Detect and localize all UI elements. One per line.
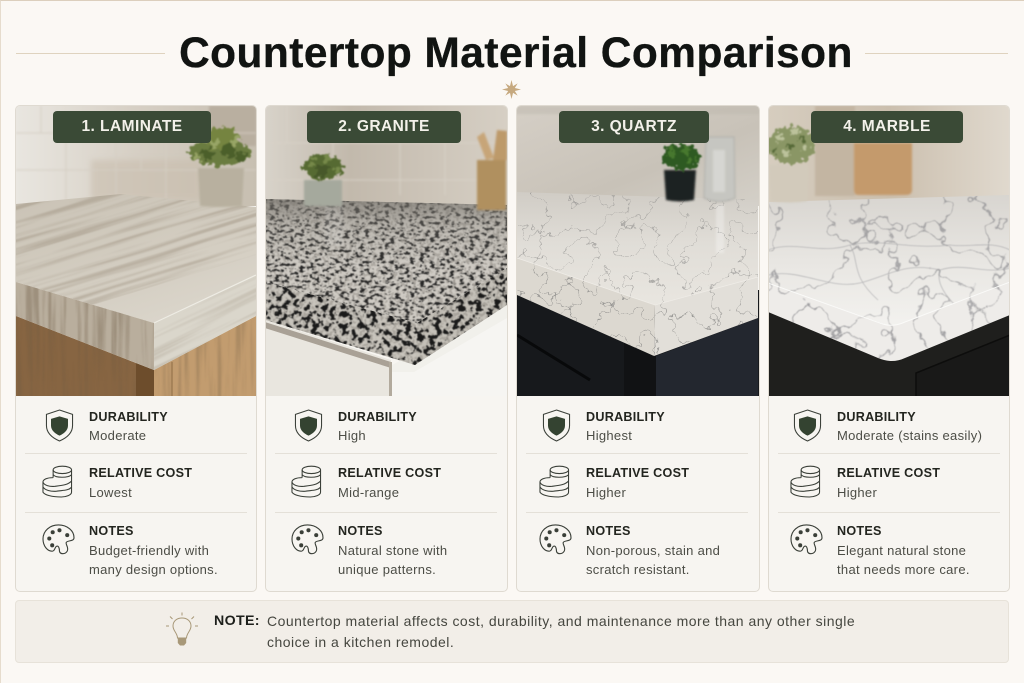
cost label: RELATIVE COST: [89, 466, 192, 480]
plant and pot: [189, 127, 251, 207]
cabinet: [768, 300, 1010, 396]
cost value: Higher: [837, 485, 877, 500]
icon: shield: [542, 410, 570, 442]
notes label: NOTES: [586, 524, 631, 538]
notes label: NOTES: [837, 524, 882, 538]
notes text: [837, 543, 970, 577]
icon: light bulb: [166, 612, 198, 646]
durability value: Highest: [586, 428, 632, 443]
row: notes: [790, 524, 970, 577]
callout: note bar: [15, 600, 1009, 663]
row: cost: [291, 466, 441, 500]
badge: quartz: 3. QUARTZ: [591, 118, 677, 135]
panel: granite: [265, 105, 508, 592]
utensil crock: [477, 130, 507, 210]
row: notes: [42, 524, 218, 577]
plant and pot: [662, 144, 700, 202]
notes text: scratch resistant.: [586, 562, 690, 577]
icon: shield: [294, 410, 322, 442]
note label: NOTE:: [214, 613, 260, 629]
row: cost: [42, 466, 192, 500]
icon: palette: [291, 524, 324, 554]
icon: coins: [291, 466, 322, 498]
cost label: RELATIVE COST: [338, 466, 441, 480]
icon: coins: [42, 466, 72, 498]
marble edges: [769, 282, 1009, 361]
row: notes: [539, 524, 720, 577]
notes text: Non-porous, stain and: [586, 543, 720, 558]
row: durability: [794, 410, 982, 443]
photo: granite countertop: [266, 106, 507, 396]
durability value: Moderate: [89, 428, 146, 443]
cutting board: [854, 143, 912, 195]
badge: marble: [811, 111, 963, 142]
notes text: that needs more care.: [837, 562, 970, 577]
cost label: RELATIVE COST: [837, 466, 940, 480]
icon: coins: [790, 466, 820, 498]
note text: choice in a kitchen remodel.: [267, 634, 454, 650]
quartz top: [517, 190, 759, 310]
durability label: DURABILITY: [837, 410, 916, 424]
title: Countertop Material Comparison: [179, 29, 853, 76]
plant and pot: [303, 154, 343, 206]
notes label: NOTES: [89, 524, 134, 538]
plant and pot: [767, 126, 815, 202]
note text: Countertop material affects cost, durability, and maintenance more than any other single: [267, 613, 855, 629]
cabinets: [265, 305, 507, 396]
cost label: RELATIVE COST: [586, 466, 689, 480]
panel: laminate: [15, 105, 256, 592]
marble top: [768, 195, 1011, 330]
panel: quartz: [516, 105, 760, 592]
durability label: DURABILITY: [338, 410, 417, 424]
notes text: [338, 543, 447, 577]
quartz edges: [517, 255, 759, 360]
durability value: Moderate (stains easily): [837, 428, 982, 443]
cabinet: [16, 316, 256, 396]
badge: laminate: 1. LAMINATE: [81, 118, 183, 135]
cost value: Higher: [586, 485, 626, 500]
icon: palette: [790, 524, 823, 554]
badge: marble: 4. MARBLE: [843, 118, 931, 135]
durability value: High: [338, 428, 366, 443]
icon: coins: [539, 466, 570, 498]
row: durability: [542, 410, 665, 443]
icon: palette: [539, 524, 572, 554]
row: cost: [790, 466, 940, 500]
badge: laminate: [53, 111, 211, 142]
notes label: NOTES: [338, 524, 383, 538]
notes text: Natural stone with: [338, 543, 447, 558]
notes text: Elegant natural stone: [837, 543, 966, 558]
row: durability: [294, 410, 417, 443]
icon: shield: [46, 410, 74, 442]
granite top: [265, 195, 508, 325]
cabinet: [516, 290, 759, 396]
notes text: [586, 543, 720, 577]
cost value: Lowest: [89, 485, 132, 500]
icon: shield: [794, 410, 822, 442]
notes text: unique patterns.: [338, 562, 436, 577]
countertop edges: [16, 274, 256, 370]
row: notes: [291, 524, 447, 577]
badge: quartz: [559, 111, 709, 142]
notes text: [89, 543, 218, 577]
note text: [267, 613, 855, 650]
durability label: DURABILITY: [89, 410, 168, 424]
badge: granite: 2. GRANITE: [338, 118, 430, 135]
notes text: many design options.: [89, 562, 218, 577]
photo: laminate countertop: [16, 106, 256, 396]
badge: granite: [307, 111, 461, 142]
photo: marble countertop: [769, 106, 1009, 396]
icon: decorative star: [502, 80, 521, 99]
durability label: DURABILITY: [586, 410, 665, 424]
granite edges: [265, 265, 508, 370]
icon: palette: [42, 524, 75, 554]
cost value: Mid-range: [338, 485, 399, 500]
row: cost: [539, 466, 689, 500]
glass jar: [704, 137, 735, 202]
panel: marble: [768, 105, 1010, 592]
notes text: Budget-friendly with: [89, 543, 209, 558]
row: durability: [46, 410, 168, 443]
countertop surface: [16, 194, 256, 323]
photo: quartz countertop: [517, 106, 759, 396]
